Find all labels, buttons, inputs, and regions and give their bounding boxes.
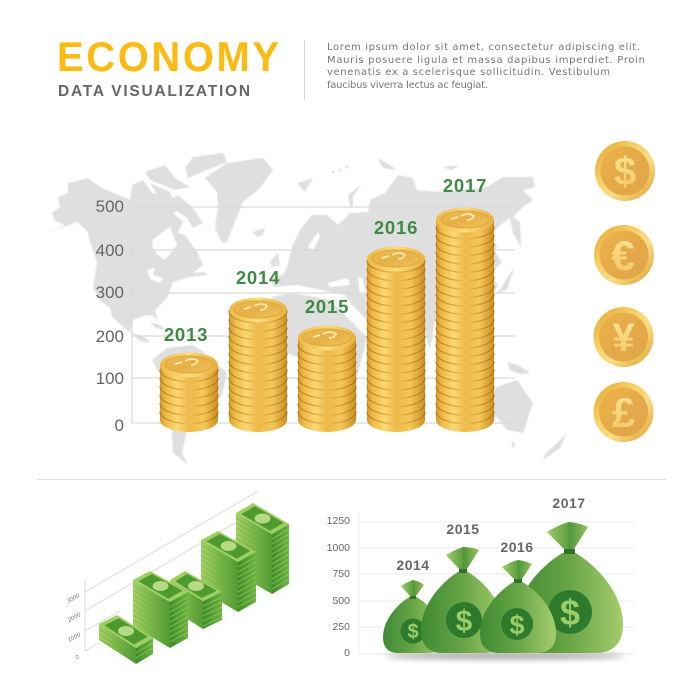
main chart y axis labels: 200 <box>96 327 124 346</box>
intro text block: Mauris posuere ligula et massa dapibus imperdiet. Proin <box>327 55 645 66</box>
money bag year labels: 2017 <box>552 495 586 511</box>
money bag 2014: $ <box>407 621 419 643</box>
cash chart axis labels: 2000 <box>66 612 82 624</box>
icon: euro coin <box>594 225 654 285</box>
intro text block: faucibus viverra lectus ac feugiat. <box>327 80 488 91</box>
bag chart y axis labels: 500 <box>332 595 350 607</box>
cash stack 3 <box>170 571 222 629</box>
bag chart y axis labels: 750 <box>332 568 350 580</box>
bag chart y axis labels <box>327 515 350 659</box>
money bag 2014 <box>383 580 443 653</box>
bag chart gridlines <box>359 512 634 654</box>
main chart y axis labels: 400 <box>96 241 124 260</box>
coin stack year labels: 2013 <box>164 324 208 345</box>
coin stack year labels: 2016 <box>374 217 418 238</box>
cash chart axis labels <box>66 593 82 662</box>
money bag 2015 <box>421 547 505 653</box>
cash stack 1 <box>99 615 153 664</box>
money bag 2016 <box>480 560 556 653</box>
coin stack 2014 <box>229 298 287 432</box>
intro text block: Lorem ipsum dolor sit amet, consectetur adipiscing elit. <box>327 42 640 53</box>
main chart y axis labels: 0 <box>115 416 124 435</box>
coin stack 2016 <box>367 246 425 432</box>
main chart y axis labels: 100 <box>96 369 124 388</box>
header divider <box>304 40 305 101</box>
money bag 2017 <box>515 522 623 653</box>
coin stack year labels <box>164 175 487 345</box>
coin stack year labels: 2015 <box>305 296 349 317</box>
panel: money bag chart <box>327 495 634 660</box>
icon: dollar coin: $ <box>614 150 636 194</box>
coin stack 2013 <box>160 352 218 432</box>
cash stack 2 <box>133 571 188 648</box>
icon: yen coin: ¥ <box>612 316 635 360</box>
main chart y axis labels: 500 <box>96 197 124 216</box>
coin stack 2015 <box>298 326 356 432</box>
intro text block: venenatis ex a scelerisque sollicitudin. Vestibulum <box>327 67 610 78</box>
money bag 2016: $ <box>509 610 525 640</box>
intro text block <box>327 42 645 91</box>
icon: pound coin <box>594 382 654 442</box>
title: ECONOMY <box>57 33 279 80</box>
main chart y axis labels <box>96 197 124 435</box>
bag ground shadow <box>385 652 625 660</box>
cash stack 5 <box>236 503 289 594</box>
cash stack 4 <box>201 531 256 612</box>
coin stack year labels: 2017 <box>443 175 487 196</box>
cash chart axis labels: 1000 <box>67 632 82 644</box>
main chart y axis labels: 300 <box>96 283 124 302</box>
icon: dollar coin <box>595 141 655 201</box>
icon: yen coin <box>594 307 654 367</box>
bag chart y axis labels: 1250 <box>327 515 350 527</box>
icon: euro coin: € <box>611 232 635 279</box>
cash chart axis labels: 0 <box>75 654 81 662</box>
money bag 2015: $ <box>456 605 473 638</box>
bag chart y axis labels: 0 <box>344 647 350 659</box>
money bag year labels: 2014 <box>396 557 430 573</box>
money bag 2017: $ <box>560 592 580 633</box>
section divider <box>37 479 666 480</box>
money bag year labels: 2015 <box>446 521 480 537</box>
coin stack 2017 <box>436 208 494 432</box>
coin stack year labels: 2014 <box>236 267 280 288</box>
money bag year labels <box>396 495 586 573</box>
world map background <box>33 153 567 465</box>
panel: isometric cash chart <box>66 491 289 664</box>
cash chart axis labels: 3000 <box>66 593 81 605</box>
bag chart y axis labels: 250 <box>332 621 350 633</box>
icon: pound coin: £ <box>612 389 635 436</box>
main chart gridlines <box>132 207 515 423</box>
cash chart axes <box>85 491 258 651</box>
bag chart y axis labels: 1000 <box>327 542 350 554</box>
subtitle: DATA VISUALIZATION <box>58 83 250 100</box>
money bag year labels: 2016 <box>500 539 534 555</box>
